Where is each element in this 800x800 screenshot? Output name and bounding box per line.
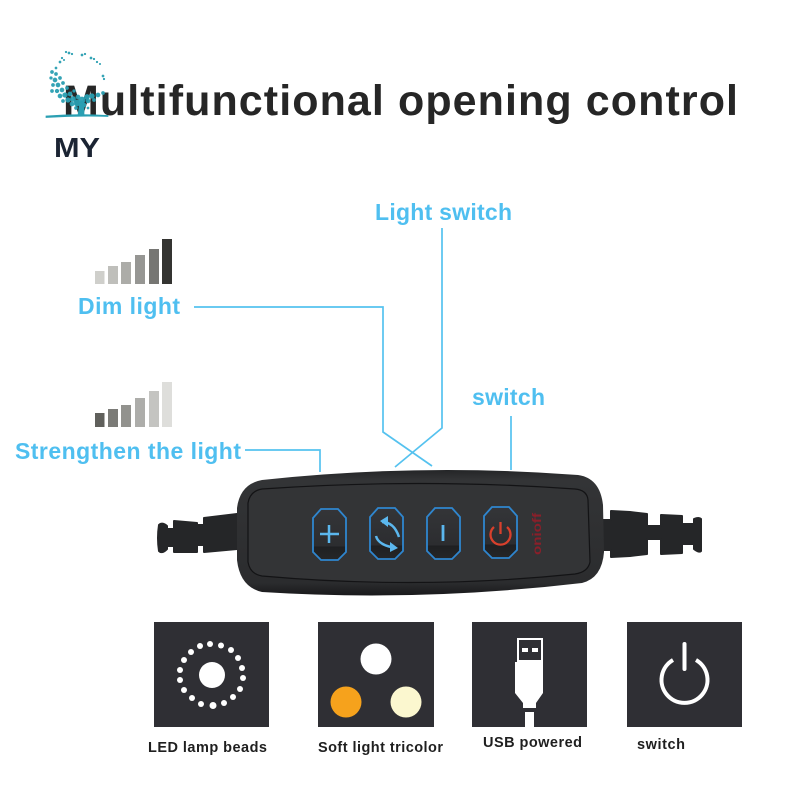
icon: dimming bars bbox=[95, 239, 172, 284]
label: Dim light: Dim light bbox=[78, 293, 180, 319]
icon: lamp beads bbox=[177, 641, 246, 709]
controller face plate bbox=[248, 484, 590, 583]
panel: switch bbox=[627, 622, 742, 753]
caption: USB powered bbox=[483, 735, 582, 751]
label: Strengthen the light: Strengthen the light bbox=[15, 438, 241, 464]
button: plus bbox=[313, 509, 346, 560]
controller bbox=[158, 470, 701, 595]
caption: switch bbox=[637, 737, 685, 753]
button: minus bbox=[427, 508, 460, 559]
caption: Soft light tricolor bbox=[318, 740, 443, 756]
button: power bbox=[484, 507, 517, 558]
panel: LED lamp beads bbox=[148, 622, 269, 756]
right cable strain relief bbox=[603, 511, 701, 557]
label: switch: switch bbox=[472, 384, 545, 410]
left cable strain relief bbox=[158, 514, 237, 552]
callout lines bbox=[194, 228, 511, 472]
panel: USB powered bbox=[472, 622, 587, 751]
logo: tree with MY bbox=[46, 51, 108, 163]
brand mark: onioff bbox=[530, 512, 544, 555]
panel: soft light tricolor bbox=[318, 622, 443, 756]
icon: USB plug bbox=[515, 639, 543, 727]
logo tree bbox=[46, 51, 108, 118]
icon: strengthening bars bbox=[95, 382, 172, 427]
label: Light switch: Light switch bbox=[375, 199, 512, 225]
logo text: MY bbox=[54, 132, 100, 163]
heading: title: Multifunctional opening control bbox=[63, 77, 738, 125]
button: cycle bbox=[370, 508, 403, 559]
icon: power symbol bbox=[662, 644, 707, 703]
icon: three colour dots bbox=[330, 644, 422, 718]
controller body bbox=[237, 470, 604, 595]
caption: LED lamp beads bbox=[148, 740, 267, 756]
